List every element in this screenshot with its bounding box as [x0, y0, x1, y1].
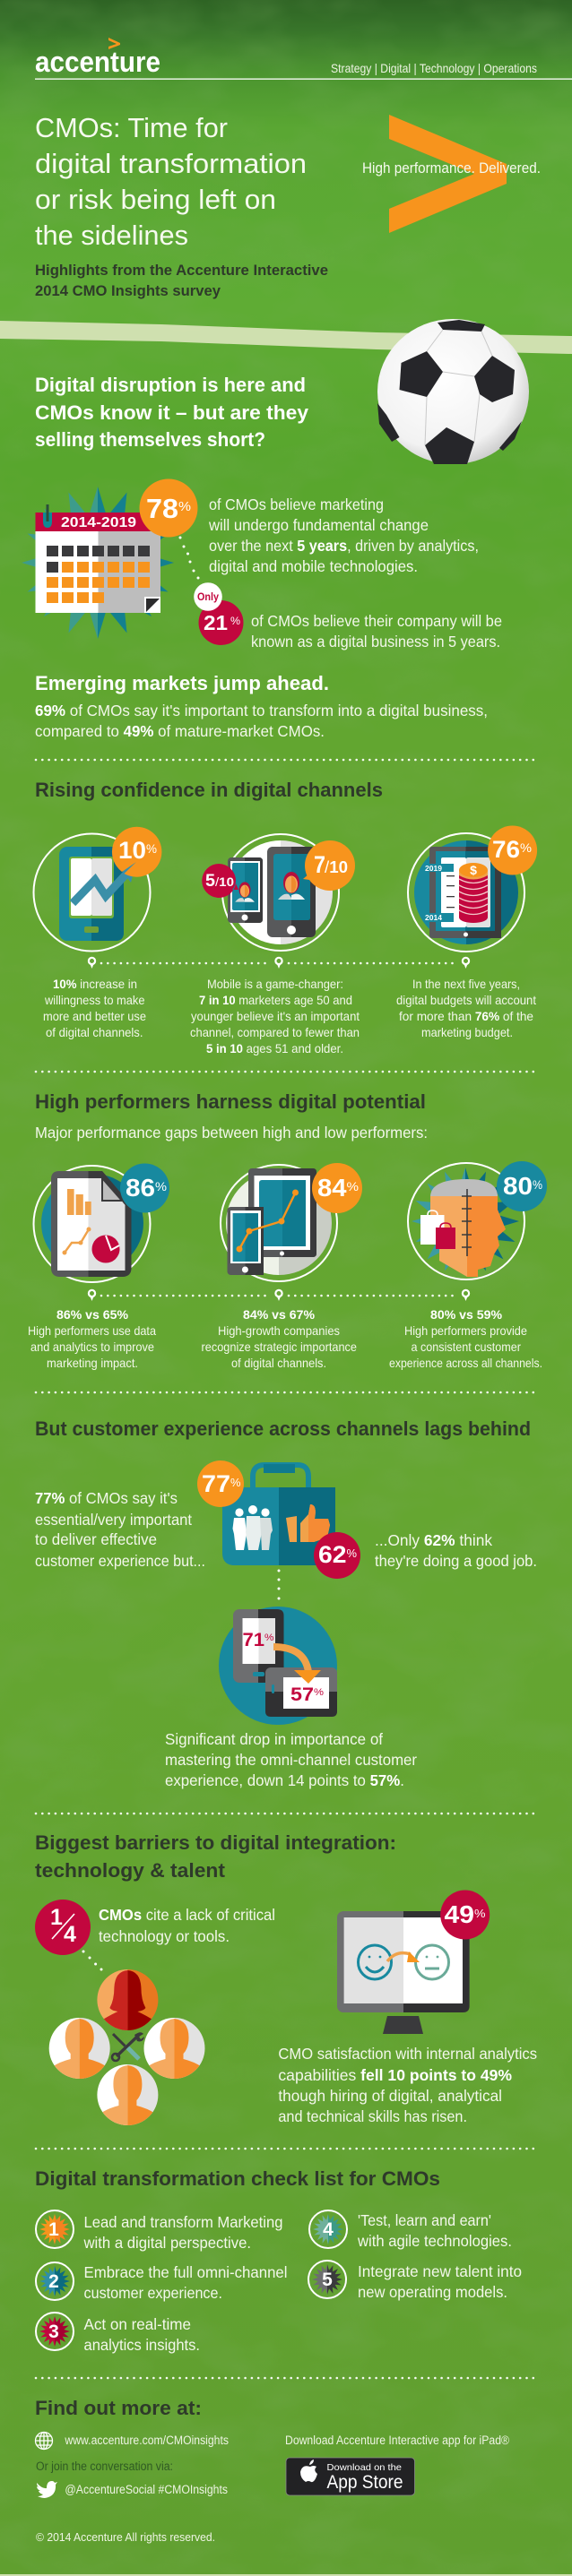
text: 77% of CMOs: essential/very important — [35, 1511, 192, 1529]
heading: digital disruption: CMOs know it – but are they — [35, 401, 308, 424]
text: significant drop: mastering the omni-channel customer — [165, 1751, 417, 1769]
text: download app: Download Accenture Interactive app for iPad® — [285, 2434, 509, 2447]
badge 4: 4 — [323, 2219, 334, 2240]
text: 80% vs 59%: experience across all channels. — [389, 1356, 542, 1370]
text: 78% statement: will undergo fundamental change — [208, 516, 429, 534]
page curl — [144, 597, 160, 613]
icon: analytics document — [34, 1163, 169, 1282]
stat: one quarter: 1 — [50, 1905, 63, 1930]
text: item 1 — [83, 2213, 283, 2252]
stat bubble 77%: % — [230, 1476, 241, 1489]
badge 2 — [36, 2262, 74, 2300]
stat bubble 49%: % — [474, 1907, 486, 1920]
heading: rising confidence: Rising confidence in digital channels — [35, 779, 383, 801]
subtitle: 2014 CMO Insights survey — [35, 282, 221, 299]
text: significant drop: Significant drop in importance of — [165, 1730, 383, 1748]
text: item 5: Integrate new talent into — [358, 2262, 522, 2280]
text: mobile: Mobile is a game-changer: — [207, 977, 343, 991]
stat bubble 10% — [112, 827, 161, 877]
badge: app store: App Store — [326, 2472, 403, 2493]
text: mobile: 5 in 10 ages 51 and older. — [206, 1041, 343, 1055]
text: 80% vs 59% — [389, 1307, 542, 1370]
timeline connector — [89, 1290, 469, 1301]
text: item 1: Lead and transform Marketing — [84, 2213, 283, 2231]
text: 84% vs 67%: of digital channels. — [231, 1356, 326, 1370]
text: 84% vs 67%: High-growth companies — [218, 1323, 340, 1338]
stat bubble 86% — [120, 1163, 169, 1213]
link: website: www.accenture.com/CMOinsights — [64, 2434, 229, 2447]
heading: high performers: High performers harness digital potential — [35, 1090, 426, 1113]
stat: only 21%: Only — [197, 590, 219, 603]
stat bubble 7/10: /10 — [325, 858, 348, 876]
text: 84% vs 67% — [201, 1307, 357, 1370]
text: 21% statement: known as a digital business in 5 years. — [251, 633, 500, 650]
badge 5: 5 — [322, 2270, 333, 2290]
icon: phone to landscape drop — [219, 1607, 337, 1725]
heading: digital disruption: selling themselves short? — [35, 428, 265, 451]
icon: phone with rising chart — [34, 827, 161, 952]
day grid — [47, 546, 150, 573]
heading: biggest barriers: technology & talent — [35, 1859, 226, 1882]
stat: only 21%: 21 — [204, 611, 228, 634]
text: budgets: digital budgets will account — [396, 993, 536, 1007]
text: 10% increase: 10% increase in — [53, 977, 137, 991]
logo wordmark: accenture — [35, 46, 160, 78]
text: 10% increase — [43, 977, 146, 1039]
text: join: Or join the conversation via: — [36, 2460, 173, 2473]
text: item 1: with a digital perspective. — [83, 2234, 251, 2252]
dotted connector — [278, 1570, 280, 1600]
text: budgets: for more than 76% of the — [399, 1009, 533, 1023]
text: item 2: Embrace the full omni-channel — [84, 2263, 287, 2281]
header logo — [35, 38, 160, 78]
emerging markets: compared to 49% of mature-market CMOs. — [35, 722, 325, 740]
timeline connector — [89, 958, 469, 969]
stat: 78% — [140, 478, 197, 538]
text: budgets: marketing budget. — [421, 1025, 513, 1039]
text: significant drop — [165, 1730, 417, 1789]
happy face — [359, 1945, 391, 1979]
heading: high performers: Major performance gaps between high and low performers: — [35, 1124, 428, 1142]
text: 80% vs 59%: a consistent customer — [411, 1340, 521, 1354]
avatar: bottom — [97, 2064, 158, 2125]
value 71%: 71 — [242, 1630, 264, 1650]
stat: one quarter — [35, 1900, 91, 1955]
badge: app store — [286, 2458, 414, 2495]
emerging markets: Emerging markets jump ahead. — [35, 672, 329, 694]
text: 86% vs 65%: High performers use data — [28, 1323, 156, 1338]
title: or risk being left on — [35, 184, 276, 215]
text: mobile: 7 in 10 marketers age 50 and — [199, 993, 352, 1007]
subtitle — [35, 262, 328, 299]
soccer ball — [377, 319, 529, 464]
text: budgets — [396, 977, 536, 1039]
stat bubble 7/10 — [303, 840, 355, 891]
heading: digital disruption: Digital disruption is here and — [35, 374, 306, 396]
link: social: @AccentureSocial #CMOInsights — [65, 2483, 228, 2496]
calendar header — [36, 513, 151, 531]
stat bubble 10%: % — [146, 841, 157, 856]
stat bubble 62%: % — [346, 1546, 357, 1560]
text: 80% vs 59%: High performers provide — [404, 1323, 527, 1338]
icon: tablet with coin stack — [408, 826, 537, 952]
brand chevron — [389, 115, 507, 233]
stat: only 21% — [194, 582, 244, 645]
year labels: 2014 — [425, 913, 442, 922]
icon: monitor with moods — [337, 1891, 490, 2034]
stat: one quarter: 4 — [64, 1922, 76, 1947]
text: only 62%: ...Only 62% think — [375, 1531, 492, 1549]
stat bubble 80% — [497, 1161, 547, 1211]
thumbs up — [286, 1504, 330, 1542]
text: 86% vs 65%: and analytics to improve — [30, 1340, 154, 1354]
text: CMO satisfaction — [278, 2045, 537, 2125]
text: item 4 — [357, 2211, 512, 2250]
text: item 3 — [84, 2315, 200, 2354]
text: 77% of CMOs: customer experience but... — [35, 1552, 205, 1570]
pitch line — [0, 321, 572, 354]
stat bubble 80%: 80 — [503, 1172, 533, 1200]
text: CMO satisfaction: capabilities fell 10 points to 49% — [278, 2066, 512, 2084]
text: 86% vs 65%: marketing impact. — [47, 1356, 138, 1370]
heading: customer experience: But customer experience across channels lags behind — [35, 1417, 531, 1440]
value 57% — [290, 1684, 324, 1705]
emerging markets: 69% of CMOs say it's important to transform into a digital business, — [35, 702, 488, 719]
text: mobile: channel, compared to fewer than — [190, 1025, 360, 1039]
text: budgets: In the next five years, — [412, 977, 520, 991]
mood arrow — [387, 1951, 420, 1962]
coin stack — [459, 863, 488, 923]
icon: twitter bird — [37, 2481, 57, 2498]
avatar: woman — [97, 1969, 158, 2030]
stat bubble 76% — [488, 826, 537, 874]
text: 10% increase: more and better use — [43, 1009, 146, 1023]
text: item 4: with agile technologies. — [357, 2232, 512, 2250]
stat bubble 77% — [197, 1460, 244, 1507]
text: 78% statement: over the next 5 years, driven by analytics, — [209, 537, 479, 555]
text: 84% vs 67%: 84% vs 67% — [243, 1307, 316, 1322]
icon: crossed tools — [112, 2032, 144, 2061]
value 57%: 57 — [290, 1684, 314, 1705]
badge: app store: Download on the — [326, 2462, 402, 2473]
header rule — [35, 79, 572, 80]
people — [233, 1505, 273, 1550]
subtitle: Highlights from the Accenture Interactive — [35, 262, 328, 279]
stat bubble 7/10: 7 — [314, 851, 325, 878]
text: only 62% — [375, 1531, 537, 1570]
stat bubble 84%: % — [346, 1179, 359, 1193]
text: 84% vs 67%: recognize strategic importance — [201, 1340, 357, 1354]
heading: high performers — [35, 1090, 428, 1142]
badge 5 — [308, 2261, 346, 2298]
year labels — [424, 864, 454, 922]
text: CMO satisfaction: CMO satisfaction with internal analytics — [278, 2045, 537, 2063]
badge 1: 1 — [48, 2219, 59, 2240]
neutral face — [416, 1945, 448, 1979]
icon: head profile with shopping bags — [408, 1161, 547, 1279]
heading: biggest barriers — [35, 1831, 396, 1882]
text: 77% of CMOs: 77% of CMOs say it's — [35, 1489, 178, 1507]
text: item 2: customer experience. — [84, 2284, 222, 2302]
brand line: High performance. Delivered. — [362, 159, 541, 177]
stat: 78%: % — [178, 499, 191, 514]
stat bubble 77%: 77 — [202, 1470, 230, 1497]
copyright: © 2014 Accenture All rights reserved. — [36, 2530, 215, 2544]
value 71%: % — [264, 1633, 274, 1643]
text: only 62%: they're doing a good job. — [375, 1552, 537, 1570]
stat bubble 84% — [312, 1163, 362, 1213]
text: 77% of CMOs — [35, 1489, 205, 1570]
text: 21% statement — [251, 612, 502, 650]
icon: two phones with avatars — [202, 834, 355, 951]
badge 3 — [36, 2313, 74, 2350]
stat bubble 5/10 — [202, 864, 238, 898]
text: item 3: analytics insights. — [84, 2336, 200, 2354]
badge 2: 2 — [48, 2271, 59, 2292]
binder clip — [43, 513, 52, 528]
stat bubble 49% — [440, 1891, 490, 1939]
text: CMO satisfaction: and technical skills has risen. — [278, 2107, 467, 2125]
text: 77% of CMOs: to deliver effective — [35, 1530, 157, 1548]
stat bubble 86%: % — [155, 1179, 167, 1193]
badge 3: 3 — [48, 2322, 59, 2342]
year labels: 2019 — [425, 864, 442, 873]
dotted connector — [82, 1950, 102, 1971]
text: 86% vs 65% — [28, 1307, 156, 1370]
header tagline: Strategy | Digital | Technology | Operations — [331, 61, 537, 75]
stat bubble 84%: 84 — [317, 1174, 347, 1202]
coin stack: $ — [470, 863, 477, 877]
stat bubble 5/10: /10 — [215, 874, 234, 889]
title — [35, 112, 307, 251]
icon: tablet and phone with chart — [221, 1163, 362, 1281]
emerging markets — [35, 672, 488, 740]
text: one quarter — [99, 1906, 275, 1945]
text: item 5 — [358, 2262, 522, 2301]
text: significant drop: experience, down 14 points to 57%. — [165, 1771, 404, 1789]
stat bubble 49%: 49 — [445, 1900, 474, 1928]
stat: 78%: 78 — [146, 493, 178, 524]
stat bubble 10%: 10 — [118, 837, 146, 864]
text: 10% increase: of digital channels. — [46, 1025, 143, 1039]
avatar: right — [143, 2018, 204, 2079]
text: 80% vs 59%: 80% vs 59% — [430, 1307, 503, 1322]
burst — [19, 484, 177, 642]
text: item 3: Act on real-time — [84, 2315, 191, 2333]
stat bubble 62% — [314, 1532, 360, 1579]
arrow — [273, 1647, 321, 1684]
text: 78% statement: digital and mobile technologies. — [209, 557, 418, 575]
calendar page — [36, 531, 99, 613]
icon: shopping bag with people and thumb — [197, 1460, 360, 1579]
text: mobile: younger believe it's an important — [191, 1009, 360, 1023]
text: 86% vs 65%: 86% vs 65% — [56, 1307, 129, 1322]
dotted connector — [179, 536, 199, 579]
heading: digital disruption — [35, 374, 308, 451]
text: 21% statement: of CMOs believe their company will be — [251, 612, 502, 630]
text: item 4: 'Test, learn and earn' — [358, 2211, 491, 2229]
text: CMO satisfaction: though hiring of digital, analytical — [278, 2087, 502, 2105]
text: item 5: new operating models. — [358, 2283, 507, 2301]
stat bubble 86%: 86 — [126, 1174, 155, 1202]
title: the sidelines — [35, 220, 188, 251]
text: 78% statement: of CMOs believe marketing — [209, 495, 384, 513]
value 71% — [242, 1630, 274, 1650]
badge 1 — [36, 2210, 74, 2248]
text: one quarter: technology or tools. — [99, 1927, 230, 1945]
text: one quarter: CMOs cite a lack of critical — [99, 1906, 275, 1924]
text: 78% statement — [208, 495, 479, 575]
badge 4 — [309, 2210, 347, 2248]
stat bubble 76%: 76 — [492, 836, 520, 863]
stat bubble 5/10: 5 — [205, 872, 215, 891]
icon: team of four avatars — [49, 1969, 204, 2125]
text: item 2 — [84, 2263, 287, 2302]
text: 10% increase: willingness to make — [44, 993, 145, 1007]
stat: only 21%: % — [230, 615, 240, 627]
value 57%: % — [314, 1687, 324, 1698]
date range: 2014-2019 — [61, 515, 136, 530]
text: mobile — [190, 977, 360, 1055]
heading: check list: Digital transformation check list for CMOs — [35, 2167, 440, 2190]
avatar: left — [49, 2018, 110, 2079]
title: CMOs: Time for — [35, 112, 228, 143]
title: digital transformation — [35, 148, 307, 179]
heading: find out more: Find out more at: — [35, 2397, 202, 2419]
logo chevron — [108, 38, 120, 49]
stat bubble 76%: % — [520, 840, 532, 855]
stat bubble 80%: % — [533, 1177, 542, 1192]
stat bubble 62%: 62 — [318, 1541, 346, 1568]
heading: biggest barriers: Biggest barriers to digital integration: — [35, 1831, 396, 1854]
icon: globe — [36, 2432, 52, 2450]
icon: calendar with burst — [19, 484, 177, 642]
